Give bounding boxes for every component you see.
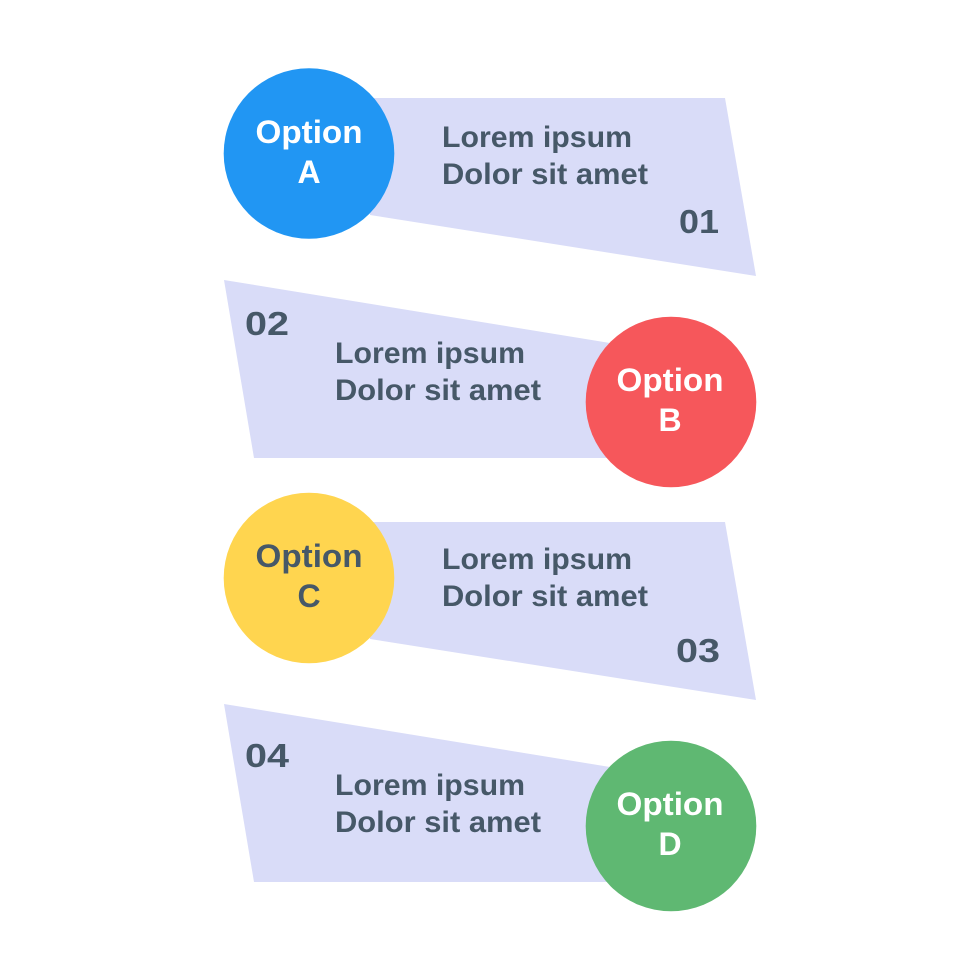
panel: option A (224, 68, 756, 276)
circle B (586, 317, 756, 487)
circle D (586, 741, 756, 911)
text B line 2: Dolor sit amet (335, 374, 541, 407)
number 01: 01 (679, 203, 719, 240)
text A line 2: Dolor sit amet (442, 158, 648, 191)
letter A: A (297, 154, 321, 190)
label C: Option (256, 538, 362, 574)
label A: Option (256, 114, 362, 150)
number 03: 03 (676, 632, 720, 669)
panel: option C (224, 493, 756, 700)
text C: Lorem ipsum (442, 543, 632, 576)
banner C (370, 522, 756, 700)
text A: Lorem ipsum (442, 121, 632, 154)
letter B: B (658, 402, 682, 438)
number 04: 04 (245, 737, 290, 774)
text B: Lorem ipsum (335, 337, 525, 370)
panel: option B (224, 280, 756, 487)
banner D (224, 704, 610, 882)
text C line 2: Dolor sit amet (442, 580, 648, 613)
banner A (370, 98, 756, 276)
circle A (224, 68, 394, 239)
circle C (224, 493, 394, 663)
label B: Option (616, 362, 724, 398)
letter C: C (297, 578, 321, 614)
letter D: D (658, 826, 682, 862)
banner B (224, 280, 610, 458)
panel: option D (224, 704, 756, 911)
text D: Lorem ipsum (335, 769, 525, 802)
label D: Option (616, 786, 724, 822)
text D line 2: Dolor sit amet (335, 806, 541, 839)
number 02: 02 (245, 305, 289, 342)
